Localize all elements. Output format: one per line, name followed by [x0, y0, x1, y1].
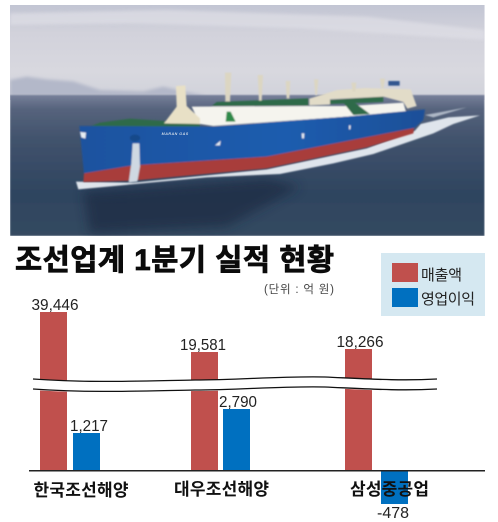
- group: 한국조선해양: 1,217: [70, 418, 108, 435]
- deck equipment: [87, 97, 383, 128]
- group: 삼성중공업: -478: [377, 505, 409, 522]
- sky: [10, 5, 485, 100]
- wake: [76, 107, 480, 189]
- masts: [225, 73, 385, 101]
- group: 삼성중공업: 18,266: [336, 334, 384, 351]
- green tank emblem: [226, 112, 236, 122]
- group: 한국조선해양: 39,446: [32, 297, 79, 314]
- anchor: [130, 135, 140, 141]
- group: 삼성중공업: 삼성중공업: [350, 480, 429, 499]
- group: 대우조선해양: 19,581: [180, 337, 226, 354]
- ship: [79, 73, 425, 183]
- axis break: [33, 377, 437, 392]
- unit note: (단위 : 억 원): [264, 282, 334, 296]
- hull markings: [80, 125, 351, 145]
- bow thruster spray: [129, 143, 140, 183]
- ship name: MARAN GAS: [162, 132, 189, 136]
- forward mast structure: [164, 85, 200, 124]
- photo: LNG carrier at sea: [10, 5, 485, 236]
- legend: revenue: 매출액: [421, 267, 462, 284]
- group: 삼성중공업: [336, 334, 429, 522]
- bar chart: [29, 297, 485, 522]
- clouds: [10, 10, 485, 40]
- group: 대우조선해양: [174, 337, 269, 499]
- legend: operating profit: 영업이익: [421, 291, 475, 308]
- group: 한국조선해양: [32, 297, 129, 500]
- funnel logo: [388, 81, 400, 86]
- sea: [10, 95, 485, 236]
- cargo tank cover: [192, 103, 406, 126]
- red lower hull: [83, 128, 414, 182]
- group: 한국조선해양: 한국조선해양: [34, 481, 129, 500]
- ship reflection: [83, 178, 300, 233]
- bridge and superstructure: [309, 88, 417, 109]
- group: 대우조선해양: 대우조선해양: [174, 480, 269, 499]
- baseline: [29, 470, 485, 472]
- legend: [381, 253, 485, 316]
- group: 대우조선해양: 2,790: [219, 394, 257, 411]
- blue hull: [79, 109, 425, 174]
- distant hills: [10, 77, 207, 96]
- title: 조선업계 1분기 실적 현황: [15, 244, 334, 277]
